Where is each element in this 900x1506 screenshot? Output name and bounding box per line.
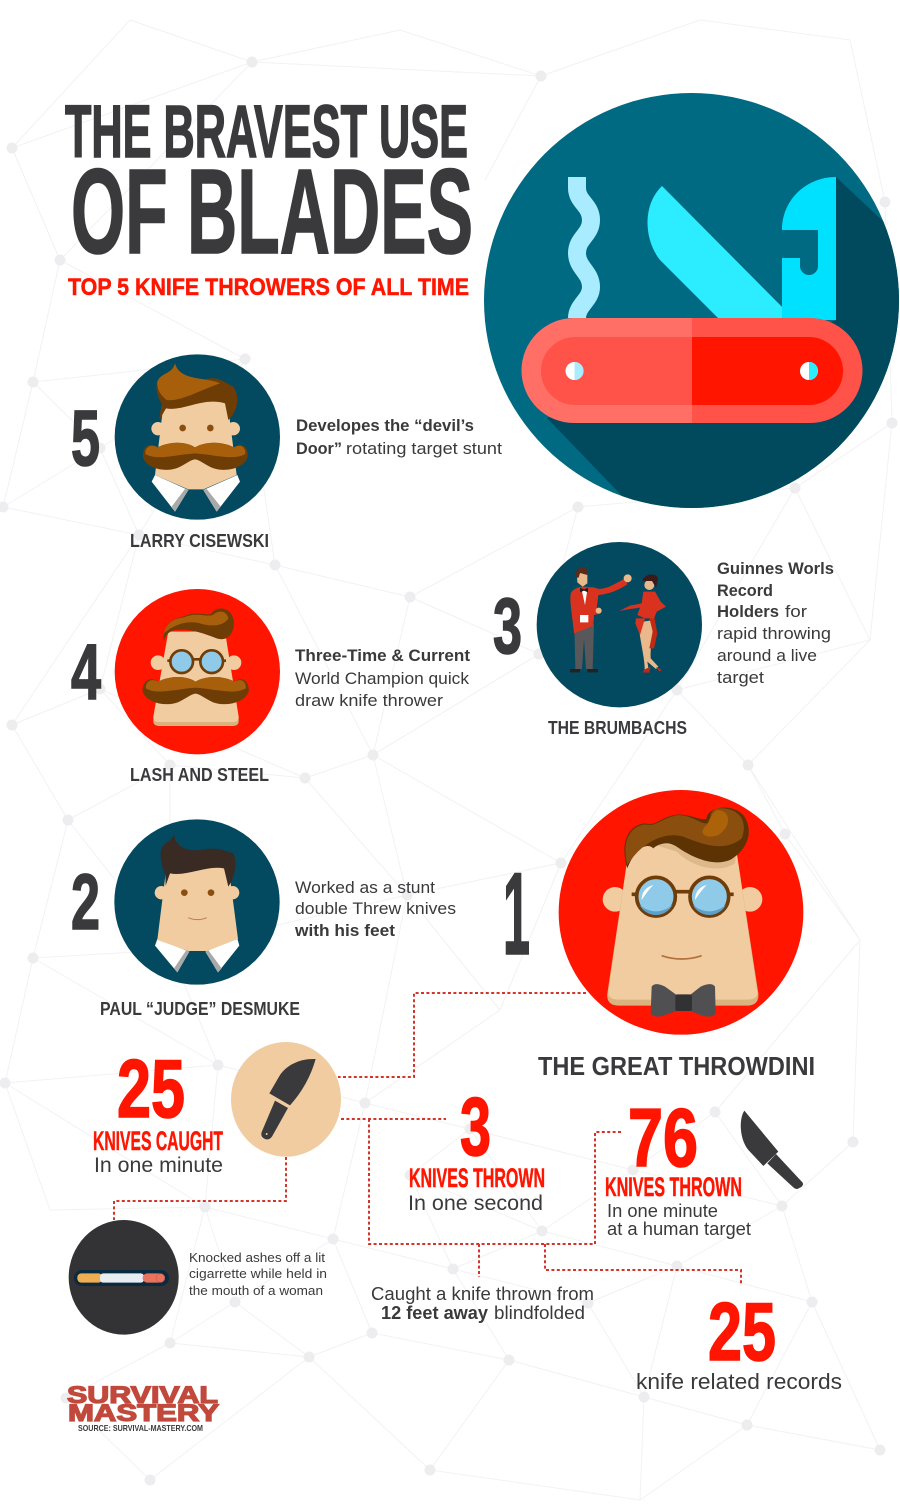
name: The Brumbachs: THE BRUMBACHS xyxy=(548,718,687,738)
description: The Brumbachs: Guinnes Worls xyxy=(717,560,834,578)
description: cigarette stunt: cigarrette while held in xyxy=(189,1266,327,1281)
description: The Brumbachs: rapid throwing xyxy=(717,625,831,643)
description: Lash and Steel: World Champion quick xyxy=(295,670,470,688)
stat: 25 knife related records: knife related records xyxy=(636,1369,842,1394)
stat: 25 knives caught: In one minute xyxy=(94,1154,223,1177)
icon: pocket knife badge xyxy=(484,93,900,530)
description: Lash and Steel xyxy=(295,647,471,710)
description: Larry Cisewski: rotating target stunt xyxy=(346,440,502,458)
stat: 76 knives thrown: KNIVES THROWN xyxy=(605,1172,742,1202)
description: The Brumbachs: for xyxy=(785,603,808,621)
stat: 76 knives thrown: In one minute xyxy=(607,1201,718,1221)
description: Lash and Steel: Three-Time & Current xyxy=(295,647,471,665)
description: The Brumbachs: around a live xyxy=(717,647,817,665)
icon: dark knife xyxy=(741,1111,803,1189)
rank 5 number: 5 xyxy=(71,393,100,482)
description: Larry Cisewski: Developes the “devil’s xyxy=(296,417,474,435)
icon: knife on cream circle xyxy=(231,1042,341,1157)
stat: 3 knives thrown xyxy=(408,1080,545,1215)
name: Lash and Steel: LASH AND STEEL xyxy=(130,765,269,785)
stat: 25 knife related records xyxy=(636,1285,842,1394)
logo: Survival Mastery: SOURCE: SURVIVAL-MASTERY.COM xyxy=(78,1423,203,1433)
icon: cigarette xyxy=(69,1220,179,1335)
stat: 3 knives thrown: KNIVES THROWN xyxy=(409,1163,545,1193)
rank 2 number: 2 xyxy=(71,857,100,946)
stat: caught blindfolded xyxy=(371,1284,594,1323)
description: The Brumbachs: Holders xyxy=(717,603,779,621)
stat: 76 knives thrown: at a human target xyxy=(607,1219,751,1239)
stat: 3 knives thrown: In one second xyxy=(408,1192,543,1215)
stat: caught blindfolded: blindfolded xyxy=(494,1303,585,1323)
description: The Brumbachs xyxy=(717,560,834,687)
description: Paul Judge Desmuke: with his feet xyxy=(294,922,396,940)
logo: Survival Mastery: MASTERY xyxy=(68,1400,219,1427)
title: OF BLADES xyxy=(71,143,473,279)
title: THE BRAVEST USE xyxy=(65,90,468,173)
description: Larry Cisewski: Door” xyxy=(296,440,342,458)
name: Paul Judge Desmuke: PAUL “JUDGE” DESMUKE xyxy=(100,999,300,1019)
portrait: Larry Cisewski xyxy=(115,354,280,520)
stat: 76 knives thrown xyxy=(605,1091,751,1239)
description: The Brumbachs: target xyxy=(717,669,764,687)
description: Paul Judge Desmuke xyxy=(294,879,456,940)
stat: 3 knives thrown: 3 xyxy=(460,1080,491,1173)
description: Paul Judge Desmuke: double Threw knives xyxy=(295,900,456,918)
description: cigarette stunt: the mouth of a woman xyxy=(189,1283,323,1298)
stat: 76 knives thrown: 76 xyxy=(628,1091,698,1184)
connector lines xyxy=(114,993,741,1285)
description: Lash and Steel: draw knife thrower xyxy=(295,692,444,710)
rank 3 number: 3 xyxy=(493,581,522,670)
stat: caught blindfolded: Caught a knife thrown from xyxy=(371,1284,594,1304)
description: cigarette stunt: Knocked ashes off a lit xyxy=(189,1250,325,1265)
description: The Brumbachs: Record xyxy=(717,582,773,600)
title xyxy=(65,90,473,279)
portrait: Paul Judge Desmuke xyxy=(114,819,280,985)
subtitle: TOP 5 KNIFE THROWERS OF ALL TIME xyxy=(68,274,469,301)
stat: 25 knives caught: KNIVES CAUGHT xyxy=(93,1126,223,1156)
description: Paul Judge Desmuke: Worked as a stunt xyxy=(295,879,435,897)
logo: Survival Mastery xyxy=(67,1382,219,1433)
stat: 25 knives caught: 25 xyxy=(117,1042,185,1135)
name: Larry Cisewski: LARRY CISEWSKI xyxy=(130,531,269,551)
text: 1 xyxy=(503,848,530,979)
portrait: The Brumbachs xyxy=(537,542,702,707)
description: cigarette stunt xyxy=(189,1250,327,1298)
rank 4 number: 4 xyxy=(71,627,101,716)
stat: caught blindfolded: 12 feet away xyxy=(381,1303,488,1323)
stat: 25 knives caught xyxy=(93,1042,223,1177)
portrait: The Great Throwdini xyxy=(559,790,803,1035)
description: Larry Cisewski xyxy=(296,417,502,458)
stat: 25 knife related records: 25 xyxy=(708,1285,776,1378)
name: The Great Throwdini: THE GREAT THROWDINI xyxy=(538,1051,815,1081)
logo: Survival Mastery: SURVIVAL xyxy=(67,1382,218,1409)
portrait: Lash and Steel xyxy=(115,589,280,754)
